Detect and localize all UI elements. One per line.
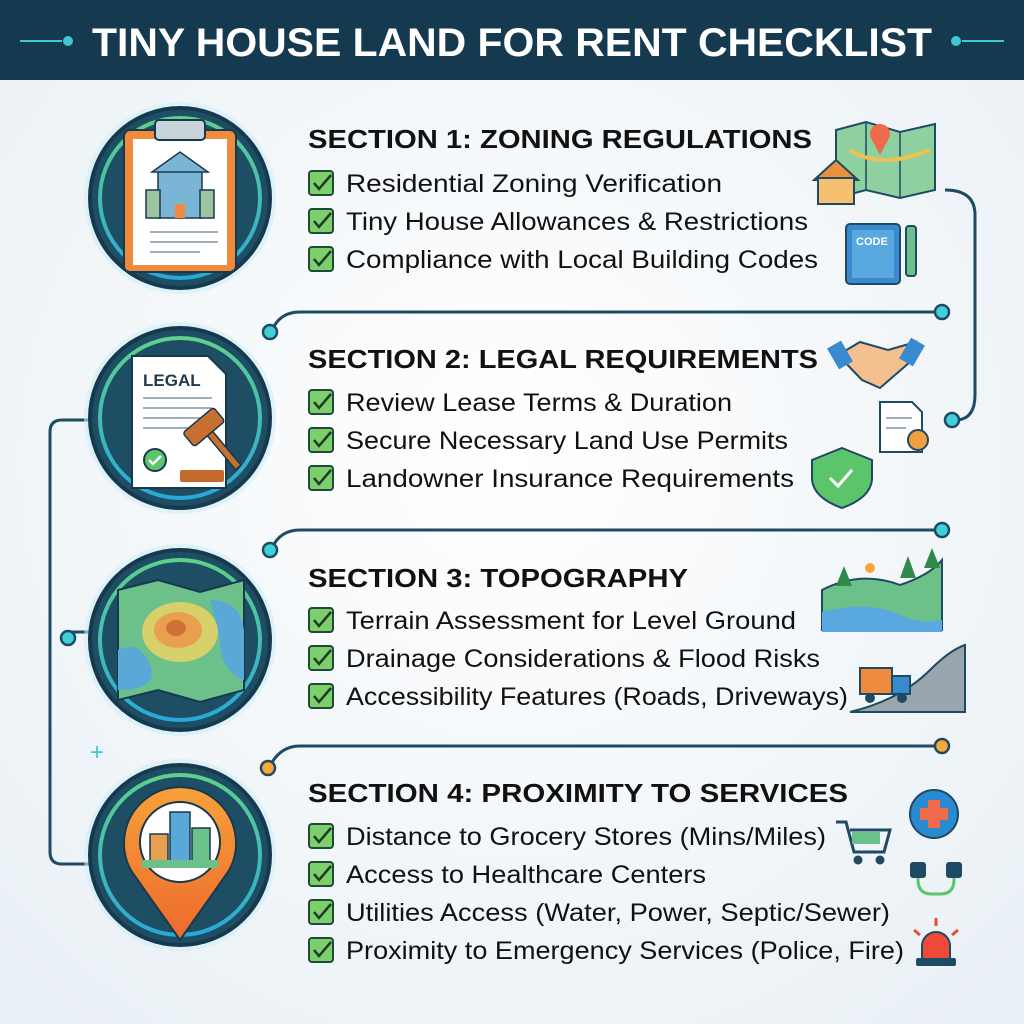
section 1 text: Residential Zoning Verification [346,170,722,198]
section 4 text: Distance to Grocery Stores (Mins/Miles) [346,823,826,851]
icon: landscape with river [822,548,942,632]
icon: handshake [827,338,925,388]
section 3 text: Drainage Considerations & Flood Risks [346,645,820,673]
section 2 text: Landowner Insurance Requirements [346,465,794,493]
icon: power plugs [910,862,962,894]
text: + [90,739,104,766]
icon: truck on road [850,645,965,712]
header banner [0,0,1024,80]
section 2 text: Secure Necessary Land Use Permits [346,427,788,455]
icon circle 4: location pin with city [84,759,276,951]
icon circle 2: legal document with gavel: LEGAL [143,371,201,390]
section 1 text: SECTION 1: ZONING REGULATIONS [308,124,812,154]
section 3 text: Terrain Assessment for Level Ground [346,607,796,635]
title: TINY HOUSE LAND FOR RENT CHECKLIST [92,21,932,65]
section 1 text: Tiny House Allowances & Restrictions [346,208,808,236]
icon circle 2: legal document with gavel [84,322,276,514]
section 3 text [308,563,848,711]
section 4 text: Access to Healthcare Centers [346,861,706,889]
icon: emergency siren [914,918,958,966]
section 1 text: Compliance with Local Building Codes [346,246,818,274]
section 3 text: Accessibility Features (Roads, Driveways) [346,683,848,711]
icon: shopping cart [836,822,890,863]
icon circle 1: clipboard [84,102,276,294]
section 4 text: Proximity to Emergency Services (Police, Fire) [346,937,904,965]
connector lines [50,190,975,864]
section 2 text [308,344,818,493]
section 4 text: Utilities Access (Water, Power, Septic/Sewer) [346,899,890,927]
icon circle 3: topographic map [84,544,276,736]
icon: certificate [880,402,928,452]
section 2 text: SECTION 2: LEGAL REQUIREMENTS [308,344,818,374]
section 2 text: Review Lease Terms & Duration [346,389,732,417]
section 4 text [308,778,904,965]
icon: map with house [814,122,935,204]
icon: code book and pen [846,224,916,284]
icon: medical cross [910,790,958,838]
section 3 text: SECTION 3: TOPOGRAPHY [308,563,688,593]
section 4 text: SECTION 4: PROXIMITY TO SERVICES [308,778,848,808]
section 1 text [308,124,818,274]
icon: shield [812,448,872,508]
icon: code book and pen: CODE [856,236,888,248]
